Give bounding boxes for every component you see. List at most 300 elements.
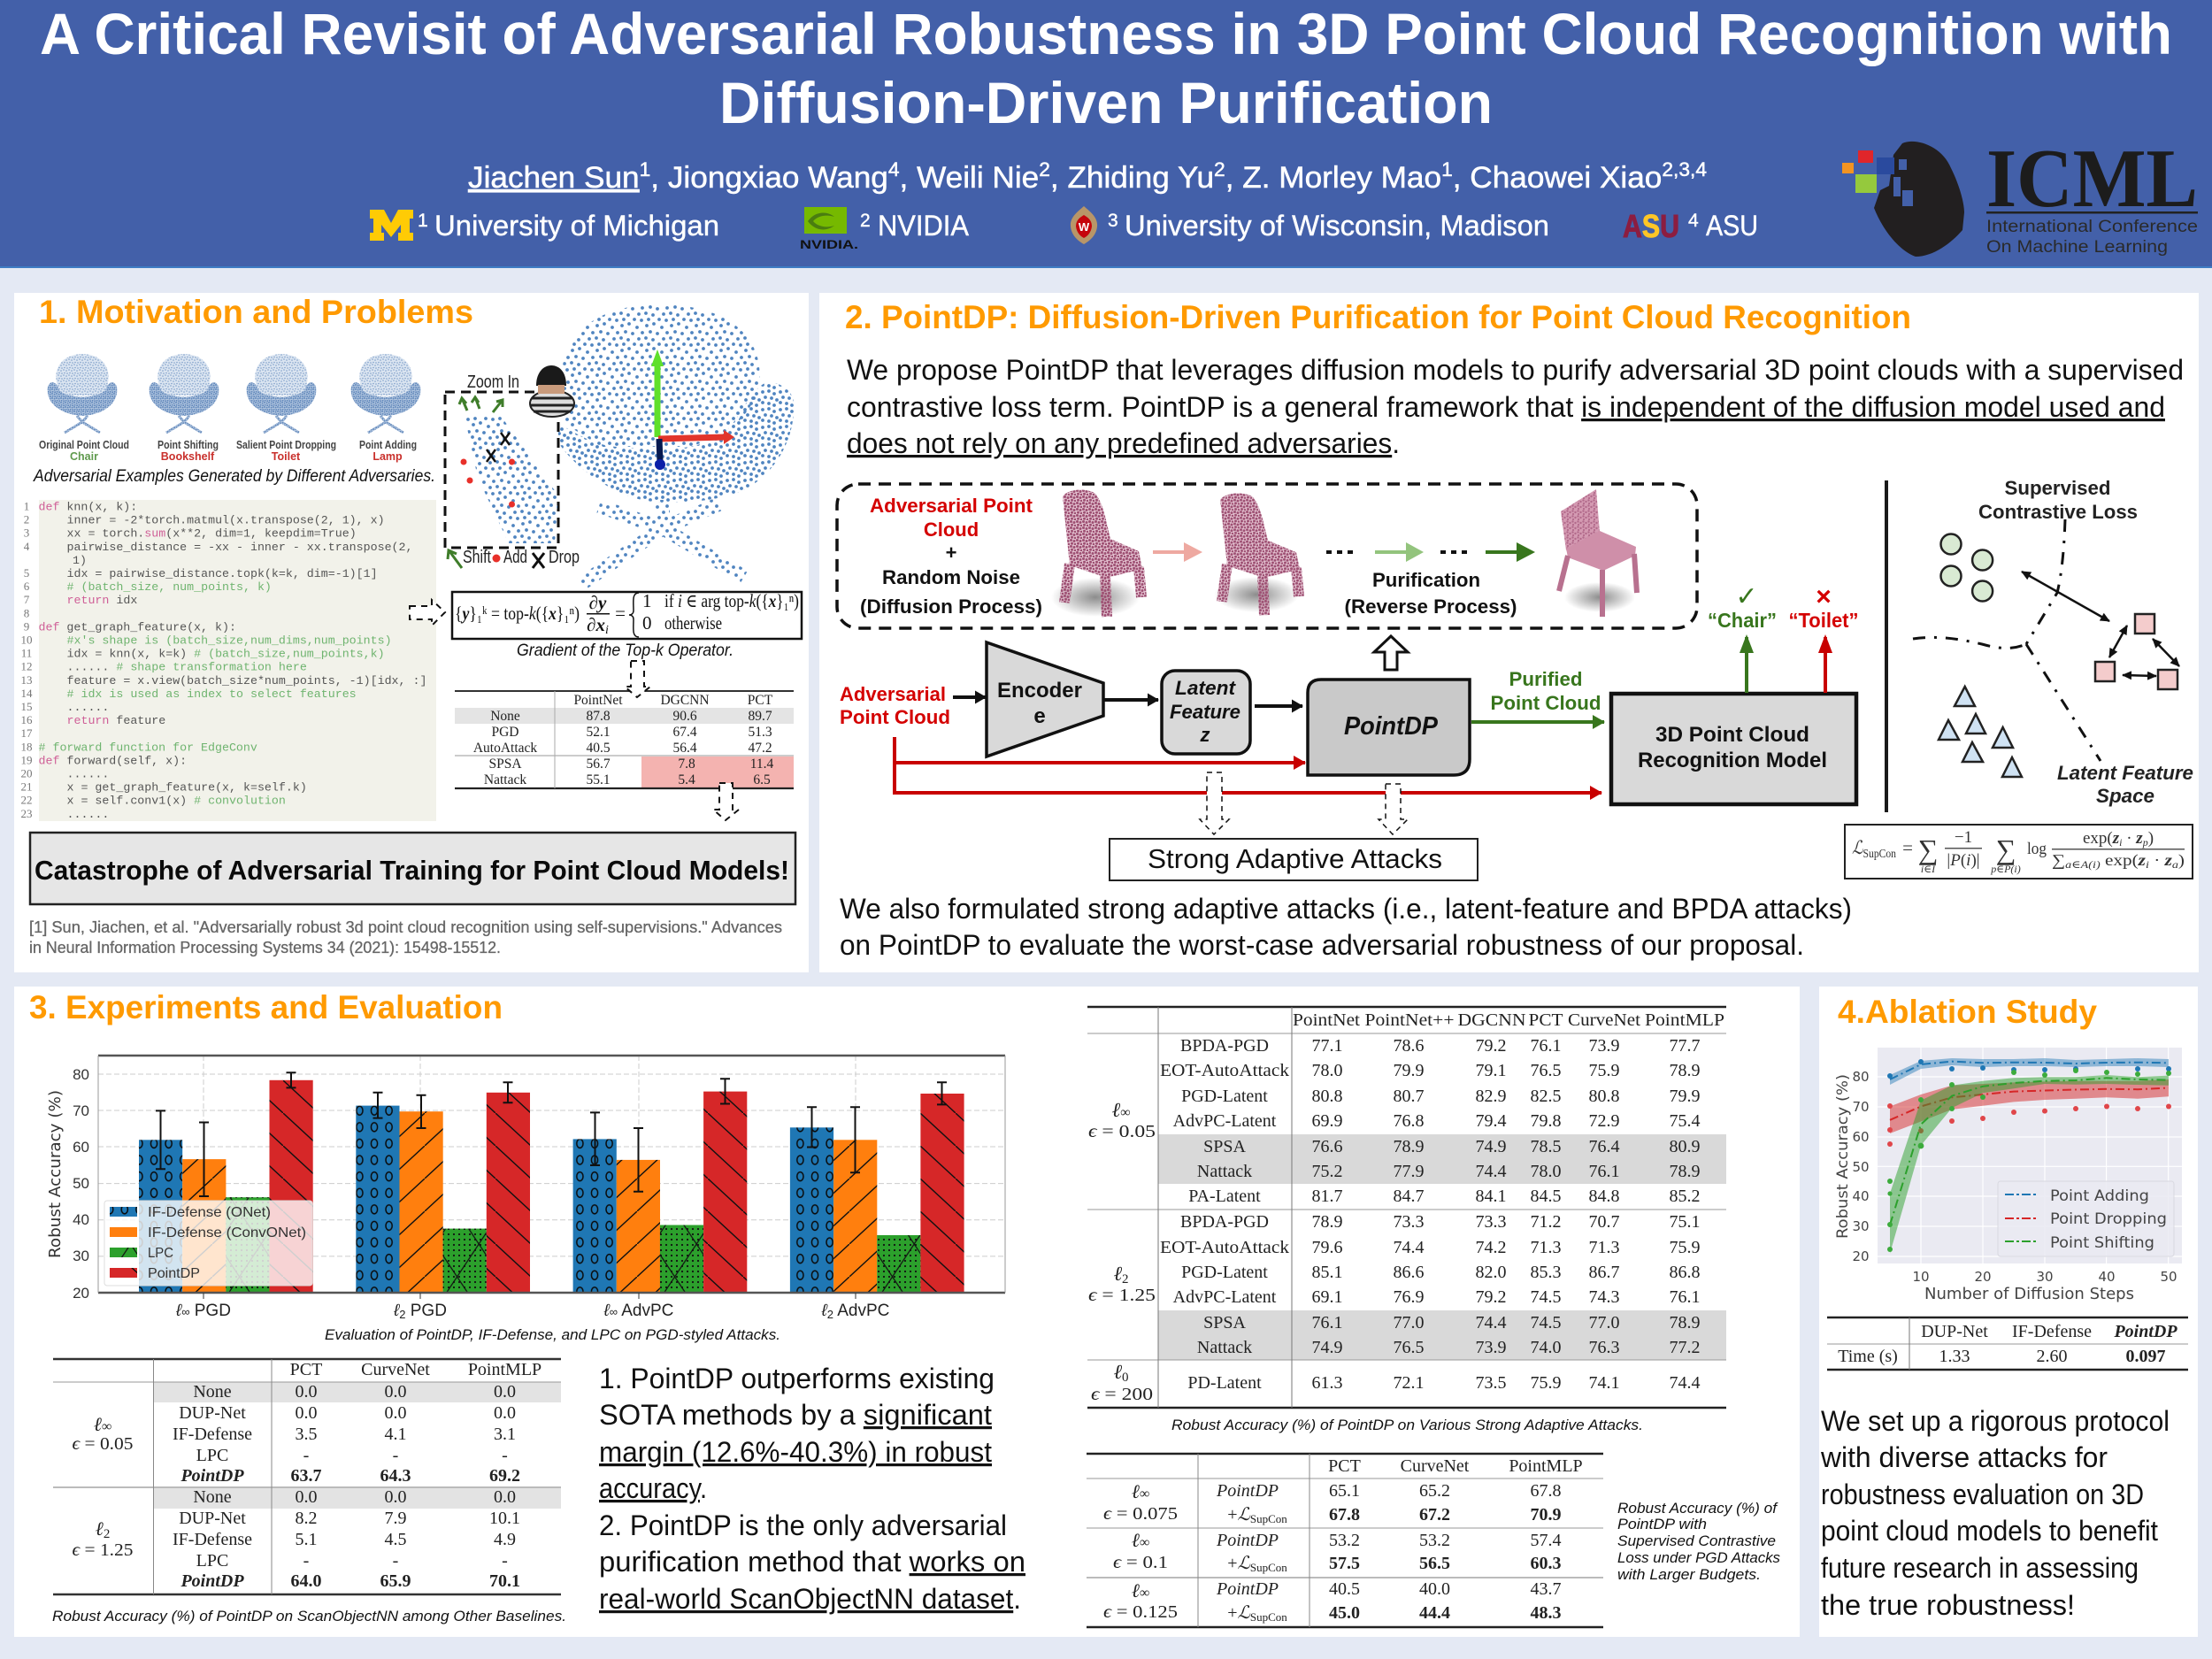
table: strong adaptive attacks: 77.2 (1669, 1338, 1701, 1357)
code listing: 15 (21, 700, 32, 713)
table: strong adaptive attacks: 73.5 (1476, 1373, 1506, 1393)
table: strong adaptive attacks: 77.7 (1669, 1036, 1701, 1056)
table: ScanObjectNN: 2 (104, 1527, 110, 1541)
table: strong adaptive attacks: 77.1 (1311, 1036, 1343, 1056)
table: strong adaptive attacks: 61.3 (1311, 1373, 1343, 1393)
formula: top-k gradient: ∂y (589, 592, 607, 613)
line chart: diffusion steps (1834, 1048, 2182, 1303)
axis labels: 40 (2098, 1269, 2116, 1285)
table: ScanObjectNN: 7.9 (384, 1509, 407, 1528)
supervised contrastive loss label (1978, 477, 2138, 523)
latent feature space label: Latent Feature (2057, 762, 2193, 784)
table: strong adaptive attacks: 76.4 (1589, 1137, 1619, 1156)
formula: top-k gradient: otherwise (664, 612, 722, 634)
table: ScanObjectNN: PointDP (180, 1571, 244, 1591)
error bars (156, 1072, 947, 1196)
output labels: “Chair” (1708, 609, 1777, 632)
table: strong adaptive attacks: PointNet (1293, 1010, 1360, 1030)
table: ScanObjectNN: 4.5 (384, 1530, 407, 1549)
adaptive attack text (840, 893, 1852, 961)
authors: 2 (1039, 158, 1050, 180)
squares class (2095, 614, 2177, 689)
code listing: def knn(x, k): (39, 501, 137, 513)
table: adversarial training results: 67.4 (672, 725, 697, 740)
affiliations: 2 (860, 211, 871, 231)
conclusion text: robustness evaluation on 3D (1821, 1479, 2144, 1510)
table: strong adaptive attacks: 76.1 (1311, 1313, 1343, 1333)
triangles class (1939, 687, 2022, 777)
table: strong adaptive attacks: 79.1 (1476, 1061, 1506, 1080)
code listing: ...... (67, 701, 109, 714)
axis labels: 10 (1912, 1269, 1930, 1285)
title: A Critical Revisit of Adversarial Robustness in 3D Point Cloud Recognition with (40, 1, 2172, 66)
table: ScanObjectNN: DUP-Net (179, 1509, 246, 1528)
formula: supcon loss: z (2138, 851, 2146, 869)
vertical separator (1885, 480, 1888, 812)
table: strong adaptive attacks: Nattack (1197, 1162, 1252, 1181)
table: larger budgets: ℓ∞ (1132, 1579, 1149, 1601)
panel: 3 experiments and evaluation (14, 987, 1800, 1637)
table: larger budgets: 65.1 (1329, 1481, 1360, 1501)
authors: 4 (888, 158, 900, 180)
supervised contrastive loss label: Supervised (2005, 477, 2111, 499)
ICML logo: International Conference (1986, 218, 2198, 236)
x axis labels: ℓ∞ PGD (175, 1302, 231, 1320)
table: strong adaptive attacks: 82.9 (1476, 1087, 1506, 1106)
table: ScanObjectNN: ϵ = 0.05 (73, 1434, 133, 1454)
y axis labels: 70 (73, 1102, 89, 1119)
strong adaptive attacks box (1110, 839, 1478, 880)
authors: 2 (1214, 158, 1225, 180)
code listing: # idx is used as index to select features (67, 687, 357, 701)
arrowheads to labels (1740, 634, 1832, 653)
axis labels: 80 (1852, 1069, 1870, 1085)
legend: shift add drop (448, 548, 580, 568)
table: strong adaptive attacks: 70.7 (1589, 1212, 1619, 1232)
table: strong adaptive attacks: 76.8 (1393, 1111, 1425, 1131)
recognition model box: 3D Point Cloud (1655, 723, 1809, 747)
caption: larger budgets: with Larger Budgets. (1617, 1567, 1761, 1583)
table: larger budgets: 53.2 (1329, 1531, 1360, 1550)
purified point cloud label: Point Cloud (1490, 692, 1601, 714)
table: strong adaptive attacks: BPDA-PGD (1180, 1212, 1269, 1232)
table: larger budgets: ℓ∞ (1132, 1480, 1149, 1502)
table: strong adaptive attacks: 80.9 (1669, 1137, 1701, 1156)
findings text (599, 1363, 1025, 1615)
table: strong adaptive attacks: 79.6 (1311, 1238, 1343, 1257)
intro text: contrastive loss term. PointDP is a general framework that is independent of the diffusion model used and (847, 391, 2165, 423)
affiliations: NVIDIA (878, 210, 970, 242)
large point cloud chair (558, 304, 794, 584)
table: strong adaptive attacks: 72.9 (1589, 1111, 1619, 1131)
table: strong adaptive attacks: 79.2 (1476, 1036, 1506, 1056)
table: ScanObjectNN: 0.0 (296, 1403, 317, 1423)
formula: supcon loss (1845, 825, 2193, 879)
series: point adding (1887, 1058, 2171, 1085)
table: strong adaptive attacks: 85.2 (1669, 1187, 1701, 1206)
table: strong adaptive attacks: ℓ (1113, 1263, 1122, 1285)
table: strong adaptive attacks: 73.9 (1589, 1036, 1619, 1056)
callout: catastrophe (30, 833, 795, 904)
supervised contrastive loss label: Contrastive Loss (1978, 501, 2138, 523)
caption: gradient: Gradient of the Top-k Operator. (517, 641, 733, 660)
table: strong adaptive attacks (1087, 1007, 1726, 1408)
table: strong adaptive attacks: 74.4 (1476, 1162, 1506, 1181)
code listing: 20 (21, 766, 32, 780)
table: strong adaptive attacks: CurveNet (1568, 1010, 1640, 1030)
table: strong adaptive attacks: 75.9 (1669, 1238, 1701, 1257)
axis labels: 50 (1852, 1159, 1870, 1175)
table: ScanObjectNN: 3.5 (296, 1425, 317, 1444)
table: adversarial training results: 87.8 (586, 709, 611, 724)
table: larger budgets: ϵ = 0.1 (1113, 1553, 1168, 1572)
dashed attack arrows (1200, 772, 1408, 834)
heading: 3. Experiments and Evaluation (29, 989, 503, 1025)
table: larger budgets: 56.5 (1419, 1554, 1450, 1573)
recognition model box: Recognition Model (1638, 749, 1827, 772)
table: strong adaptive attacks: Nattack (1197, 1338, 1252, 1357)
code listing: 5 (24, 566, 29, 580)
code listing (21, 499, 436, 821)
table: strong adaptive attacks: ℓ∞ (1111, 1099, 1131, 1121)
affiliations: 4 (1688, 211, 1699, 231)
formula: supcon loss: ℒ (1852, 837, 1865, 858)
latent feature box (1162, 671, 1250, 754)
table: strong adaptive attacks: 80.8 (1311, 1087, 1343, 1106)
caption: strong adaptive table: Robust Accuracy (%) of PointDP on Various Strong Adaptive Attacks. (1171, 1417, 1643, 1433)
code listing: pairwise_distance = -xx - inner - xx.transpose(2, (67, 541, 412, 554)
table: ScanObjectNN: 4.9 (494, 1530, 516, 1549)
formula: supcon loss: p∈P(i) (1990, 863, 2021, 875)
code listing: 14 (21, 687, 33, 700)
flow arrows (895, 637, 1825, 793)
table: strong adaptive attacks: 73.3 (1393, 1212, 1425, 1232)
table: adversarial training results: Nattack (484, 772, 526, 787)
table: ScanObjectNN: - (303, 1551, 309, 1571)
table: larger budgets: 43.7 (1531, 1579, 1561, 1599)
table: strong adaptive attacks: 76.1 (1531, 1036, 1561, 1056)
table: strong adaptive attacks: PGD-Latent (1181, 1263, 1268, 1282)
adversarial examples chairs: Salient Point Dropping (236, 439, 336, 451)
authors: , Chaowei Xiao (1453, 161, 1662, 195)
diffusion dashed box: Random Noise (882, 566, 1020, 588)
y axis labels: 30 (73, 1248, 89, 1264)
output labels (1708, 581, 1858, 632)
output labels: ✓ (1735, 581, 1758, 612)
table: ScanObjectNN: - (502, 1551, 508, 1571)
heading: 1. Motivation and Problems (39, 294, 473, 330)
formula: supcon loss: = (1902, 837, 1913, 858)
table: time: 2.60 (2037, 1347, 2067, 1366)
table: ScanObjectNN: IF-Defense (173, 1425, 252, 1444)
table: ScanObjectNN: 3.1 (494, 1425, 516, 1444)
table: ScanObjectNN: LPC (196, 1446, 228, 1465)
arrows between chairs (1153, 542, 1535, 562)
formula: supcon loss: z (2163, 851, 2172, 869)
intro text: does not rely on any predefined adversaries. (847, 427, 1400, 459)
diffusion dashed box (837, 484, 1697, 628)
icon: head silhouette (1874, 142, 1964, 257)
table: time: Time (s) (1838, 1347, 1898, 1366)
table: ScanObjectNN: 63.7 (290, 1466, 322, 1486)
authors: 1 (640, 158, 650, 180)
table: strong adaptive attacks: ϵ = 1.25 (1088, 1286, 1156, 1305)
formula: supcon loss: ∑ (2052, 851, 2063, 869)
axis labels: Number of Diffusion Steps (1924, 1285, 2134, 1303)
table: ScanObjectNN: 10.1 (489, 1509, 520, 1528)
table: larger budgets: 40.5 (1329, 1579, 1360, 1599)
table: larger budgets: +ℒ (1227, 1505, 1250, 1525)
code listing: ...... (67, 768, 109, 780)
bars: l2 AdvPC (790, 1094, 964, 1293)
table: larger budgets: 48.3 (1531, 1603, 1561, 1623)
code listing: 11 (21, 647, 32, 660)
table: strong adaptive attacks: PCT (1529, 1010, 1563, 1030)
authors: 2,3,4 (1662, 158, 1707, 180)
table: ScanObjectNN: LPC (196, 1551, 228, 1571)
code listing: 2 (24, 513, 29, 526)
affiliations: 3 (1108, 211, 1118, 231)
table: larger budgets: +ℒ (1227, 1554, 1250, 1573)
PointDP box: PointDP (1344, 712, 1439, 741)
icon: ASU logo: ASU (1623, 208, 1679, 244)
x axis labels: AdvPC (833, 1302, 889, 1320)
table: ScanObjectNN: 0.0 (296, 1382, 317, 1402)
code listing: 23 (21, 807, 32, 820)
latent feature box: z (1200, 724, 1210, 746)
table: adversarial training results: 52.1 (586, 725, 611, 740)
table: strong adaptive attacks: 75.9 (1531, 1373, 1561, 1393)
table: ScanObjectNN: 0.0 (494, 1382, 516, 1402)
formula: top-k gradient: i (605, 624, 609, 637)
latent feature space diagram (1913, 477, 2193, 807)
authors: , Zhiding Yu (1050, 161, 1214, 195)
caption: larger budgets: PointDP with (1617, 1517, 1707, 1532)
PointDP box (1308, 680, 1470, 775)
code listing: 3 (24, 526, 29, 540)
legend: shift add drop: Shift (463, 548, 491, 567)
table: strong adaptive attacks: BPDA-PGD (1180, 1036, 1269, 1056)
formula: supcon loss: |P(i)| (1947, 851, 1980, 870)
table: ScanObjectNN: 0.0 (296, 1487, 317, 1507)
table: larger budgets: 44.4 (1419, 1603, 1450, 1623)
ICML logo: On Machine Learning (1986, 238, 2168, 257)
table: adversarial training results: 6.5 (753, 772, 771, 787)
bar chart: robust accuracy (46, 1056, 1005, 1321)
bars: lp-inf AdvPC (573, 1092, 747, 1293)
table: strong adaptive attacks: 78.9 (1669, 1162, 1701, 1181)
table: adversarial training results: None (490, 709, 520, 724)
reference: [1] Sun, Jiachen, et al. "Adversarially robust 3d point cloud recognition using self-supervisions." Advances (29, 918, 782, 936)
input label (840, 683, 950, 728)
formula: supcon loss: i∈I (1921, 863, 1936, 875)
code listing: 13 (21, 673, 32, 687)
table: ScanObjectNN: ℓ∞ (94, 1413, 111, 1435)
table: ScanObjectNN: ℓ (96, 1517, 104, 1540)
noisy chair 2 (1214, 493, 1300, 615)
caption: bar chart: Evaluation of PointDP, IF-Defense, and LPC on PGD-styled Attacks. (325, 1326, 780, 1343)
legend (1998, 1181, 2174, 1256)
bars: l2 PGD (356, 1093, 530, 1293)
table: strong adaptive attacks: 76.5 (1393, 1338, 1425, 1357)
noisy chair 1 (1051, 490, 1142, 617)
findings text: real-world ScanObjectNN dataset. (599, 1583, 1021, 1615)
formula: supcon loss: log (2027, 840, 2047, 858)
table: strong adaptive attacks: 74.4 (1393, 1238, 1425, 1257)
table: time: 0.097 (2125, 1347, 2166, 1366)
code listing: 17 (21, 726, 33, 740)
table: strong adaptive attacks: 78.0 (1531, 1162, 1561, 1181)
table: ScanObjectNN: 69.2 (489, 1466, 520, 1486)
formula: top-k gradient: 1 (642, 590, 651, 611)
x axis labels: ℓ (821, 1302, 828, 1320)
zoom-in box (445, 373, 580, 568)
formula: supcon loss: ) (2178, 851, 2185, 870)
table: strong adaptive attacks: 78.9 (1311, 1212, 1343, 1232)
table: larger budgets: PointDP (1216, 1579, 1279, 1599)
table: ScanObjectNN: IF-Defense (173, 1530, 252, 1549)
authors: Jiachen Sun (468, 161, 640, 195)
code listing: 4 (24, 540, 30, 553)
latent feature box: Feature (1170, 701, 1240, 723)
diffusion dashed box: Purification (1372, 569, 1480, 591)
arrow: pointdp to diffusion (1374, 636, 1408, 670)
affiliations: ASU (1706, 210, 1758, 242)
formula: top-k gradient: if i ∈ arg top-k({x}₁ⁿ) (664, 590, 799, 611)
adaptive attack text: on PointDP to evaluate the worst-case adversarial robustness of our proposal. (840, 929, 1804, 961)
code listing: # (batch_size, num_points, k) (67, 580, 272, 594)
code listing: 6 (24, 580, 30, 593)
diffusion dashed box: (Diffusion Process) (860, 595, 1042, 618)
table: strong adaptive attacks: DGCNN (1458, 1010, 1525, 1030)
findings text: 2. PointDP is the only adversarial (599, 1509, 1007, 1541)
y axis labels: 80 (73, 1066, 89, 1083)
table: adversarial training results: AutoAttack (473, 741, 537, 756)
table: ScanObjectNN: 64.3 (380, 1466, 411, 1486)
table: ScanObjectNN: 65.9 (380, 1571, 411, 1591)
axis labels: Robust Accuracy (%) (1834, 1074, 1852, 1239)
legend: LPC (148, 1246, 173, 1261)
formula: top-k gradient: 0 (642, 612, 651, 634)
x axis labels: 2 (827, 1308, 833, 1321)
authors: 1 (1441, 158, 1453, 180)
code listing: 18 (21, 740, 32, 753)
code listing: 1) (73, 554, 87, 567)
formula: supcon loss: a∈A(i) (2065, 858, 2101, 871)
ICML logo: ICML (1986, 133, 2198, 225)
table: strong adaptive attacks: 69.1 (1311, 1287, 1343, 1307)
y axis labels: 20 (73, 1285, 89, 1302)
authors: , Jiongxiao Wang (650, 161, 888, 195)
table: larger budgets: 67.8 (1329, 1505, 1360, 1525)
ICML logo (1842, 133, 2198, 257)
table: strong adaptive attacks: 75.1 (1669, 1212, 1701, 1232)
table: larger budgets: PointMLP (1509, 1456, 1583, 1476)
series: point shifting (1887, 1068, 2171, 1254)
table: strong adaptive attacks: 79.9 (1669, 1087, 1701, 1106)
table: larger budgets: SupCon (1250, 1561, 1287, 1574)
findings text: SOTA methods by a significant (599, 1399, 992, 1431)
legend: Point Adding (2050, 1187, 2149, 1205)
legend (104, 1201, 312, 1286)
table: strong adaptive attacks: AdvPC-Latent (1173, 1287, 1277, 1307)
formula: supcon loss: exp( (2101, 851, 2139, 870)
adversarial examples chairs: Chair (70, 450, 98, 463)
adversarial examples chairs: Point Shifting (157, 439, 219, 451)
table: larger budgets: 53.2 (1419, 1531, 1450, 1550)
latent feature space label: Space (2096, 785, 2154, 807)
latent feature box: Latent (1175, 677, 1237, 699)
table: larger budgets: ℓ∞ (1132, 1529, 1149, 1551)
table: strong adaptive attacks: 76.5 (1531, 1061, 1561, 1080)
panel: 1 motivation and problems (14, 293, 809, 972)
table: strong adaptive attacks: 85.3 (1531, 1263, 1561, 1282)
circles class (1941, 534, 1993, 602)
code listing: 7 (24, 593, 30, 606)
table: strong adaptive attacks: 77.0 (1589, 1313, 1619, 1333)
icon: NVIDIA logo (800, 207, 858, 251)
arrow: formula to table (625, 661, 650, 697)
table: strong adaptive attacks: 74.9 (1311, 1338, 1343, 1357)
table: strong adaptive attacks: 86.7 (1589, 1263, 1619, 1282)
table: strong adaptive attacks: 86.8 (1669, 1263, 1701, 1282)
encoder: e (1033, 704, 1046, 728)
table: strong adaptive attacks: 77.9 (1393, 1162, 1425, 1181)
y axis labels (73, 1066, 89, 1302)
code listing: return idx (67, 594, 137, 607)
table: strong adaptive attacks: 81.7 (1311, 1187, 1343, 1206)
arrow: table to conclusion (713, 783, 739, 820)
code listing: inner = -2*torch.matmul(x.transpose(2, 1), x) (67, 514, 385, 527)
conclusion text: We set up a rigorous protocol (1821, 1405, 2170, 1437)
table: ScanObjectNN: - (393, 1551, 398, 1571)
table: larger budgets: 45.0 (1329, 1603, 1360, 1623)
table: ScanObjectNN: 70.1 (489, 1571, 520, 1591)
table: larger budgets: ϵ = 0.075 (1103, 1504, 1178, 1524)
adversarial examples chairs: Point Adding (359, 439, 417, 451)
caption: ScanObjectNN table: Robust Accuracy (%) of PointDP on ScanObjectNN among Other Baselines. (52, 1608, 566, 1624)
table: larger budgets: 67.2 (1419, 1505, 1450, 1525)
table: larger budgets: PCT (1328, 1456, 1361, 1476)
table: larger budgets: CurveNet (1401, 1456, 1470, 1476)
heading: 4.Ablation Study (1838, 994, 2097, 1030)
findings text: purification method that works on (599, 1546, 1025, 1578)
table: ScanObjectNN: PointDP (180, 1466, 244, 1486)
affiliations: University of Wisconsin, Madison (1125, 210, 1549, 242)
table: ScanObjectNN: PointMLP (468, 1360, 541, 1379)
table: larger budgets: 57.5 (1329, 1554, 1360, 1573)
formula: top-k gradient (452, 590, 802, 639)
table: strong adaptive attacks: 74.5 (1531, 1313, 1561, 1333)
table: ScanObjectNN: 0.0 (494, 1403, 516, 1423)
formula: supcon loss: · (2122, 829, 2136, 848)
legend: IF-Defense (ONet) (148, 1205, 271, 1220)
table: strong adaptive attacks: 76.1 (1589, 1162, 1619, 1181)
table: ScanObjectNN: 0.0 (384, 1382, 407, 1402)
table: strong adaptive attacks: 78.9 (1669, 1061, 1701, 1080)
table: strong adaptive attacks: 74.4 (1669, 1373, 1701, 1393)
conclusion text: the true robustness! (1821, 1589, 2075, 1621)
diffusion dashed box: Cloud (924, 518, 979, 541)
table: ScanObjectNN: 5.1 (296, 1530, 317, 1549)
code listing: ...... # shape transformation here (67, 661, 307, 674)
encoder (987, 642, 1103, 757)
code listing: 19 (21, 753, 32, 766)
table: strong adaptive attacks: 84.7 (1393, 1187, 1425, 1206)
reference (29, 918, 782, 956)
table: ScanObjectNN: None (193, 1487, 232, 1507)
table: larger budgets: 67.8 (1531, 1481, 1561, 1501)
